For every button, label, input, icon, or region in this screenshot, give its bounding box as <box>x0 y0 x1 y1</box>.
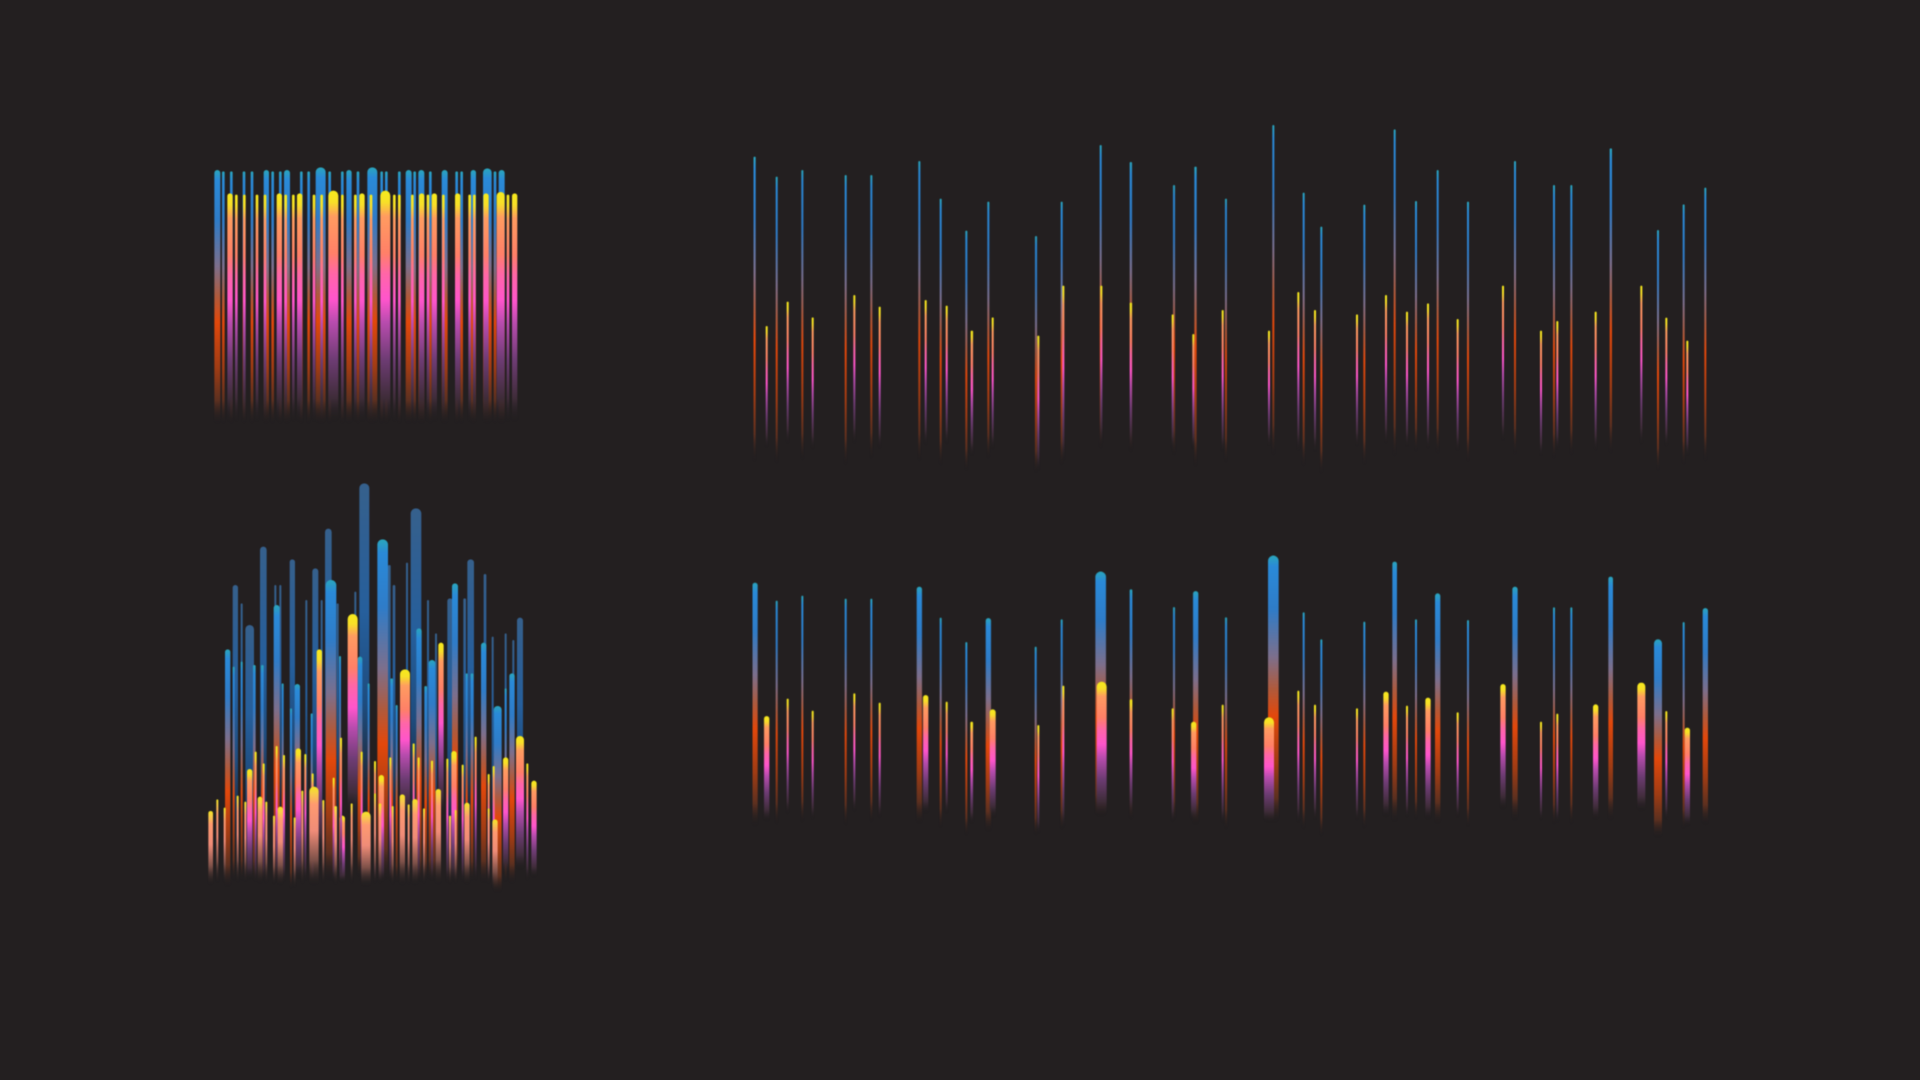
yellow bars, left half <box>764 682 1224 833</box>
panel: varied-width bar series, bottom right <box>752 556 1708 838</box>
faded blue back bars <box>233 483 523 878</box>
yellow bars, right half <box>1264 683 1690 826</box>
blue bars, left half <box>752 572 1227 835</box>
blue bars <box>214 167 505 423</box>
blue lines, left half <box>754 145 1227 473</box>
blue bars, right half <box>1268 556 1708 838</box>
panel: thin bar series, top right <box>754 125 1706 473</box>
blue lines, right half <box>1272 125 1706 473</box>
panel: clustered bar skyline, bottom left <box>208 483 537 893</box>
yellow lines, right half <box>1268 286 1688 456</box>
tall yellow bars <box>247 614 537 882</box>
bright blue mid bars <box>225 539 515 893</box>
short peach bars <box>208 787 498 889</box>
panel: dense bar block, top left <box>214 167 517 423</box>
yellow lines, left half <box>766 286 1224 471</box>
yellow bars <box>227 191 517 422</box>
